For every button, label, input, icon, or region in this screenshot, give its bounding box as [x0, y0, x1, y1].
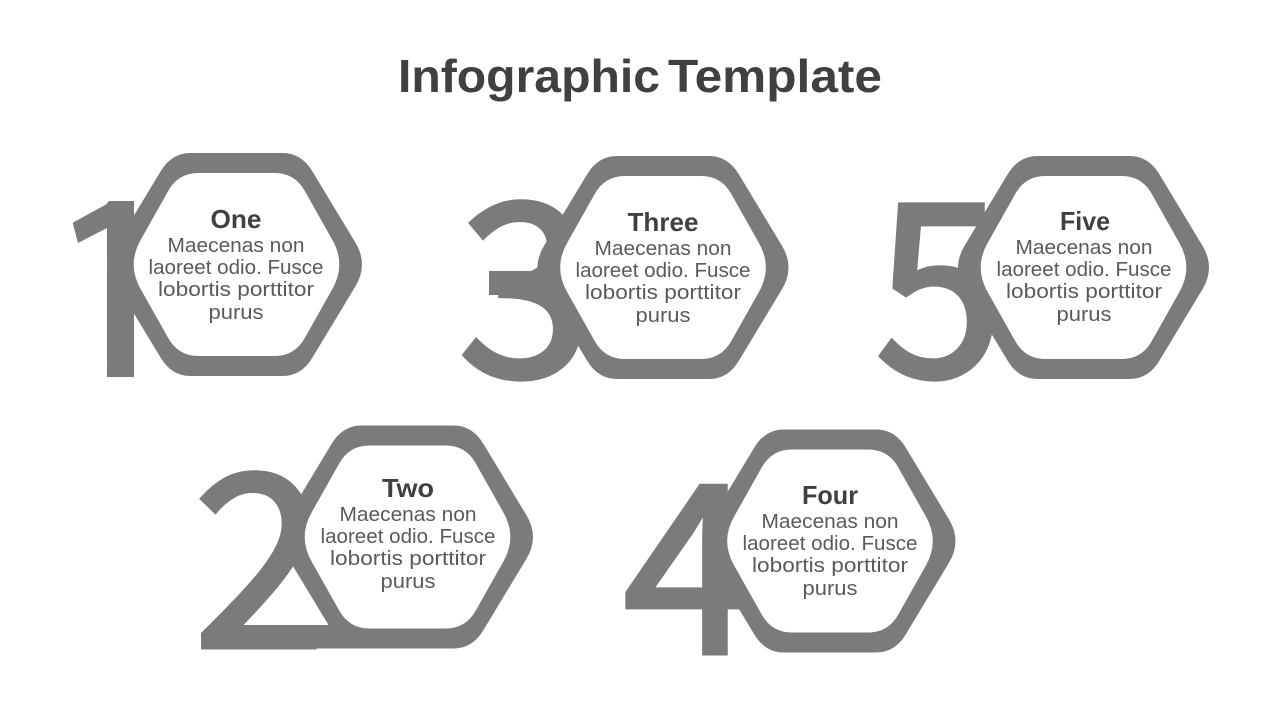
item five	[875, 97, 1209, 445]
text two	[320, 473, 496, 593]
item four	[623, 382, 956, 720]
text two: Two	[382, 473, 434, 503]
text one: purus	[208, 302, 264, 324]
text three	[576, 207, 750, 327]
text three: purus	[636, 305, 690, 327]
text five: Maecenas non	[1016, 237, 1152, 259]
text four	[742, 480, 918, 600]
text one	[148, 204, 324, 324]
number 1: 1	[47, 100, 180, 447]
text four: laoreet odio. Fusce	[742, 533, 918, 555]
item two	[193, 370, 533, 717]
number 1	[72, 201, 134, 377]
number 2: 2	[193, 370, 326, 717]
text four: purus	[802, 578, 858, 600]
item three	[458, 99, 788, 446]
text three: laoreet odio. Fusce	[576, 260, 750, 282]
hexagon five	[958, 156, 1209, 379]
text three: Maecenas non	[594, 238, 732, 260]
hexagon four	[704, 430, 956, 652]
text five: Five	[1060, 206, 1110, 236]
text two: laoreet odio. Fusce	[320, 526, 496, 548]
hexagon two	[282, 426, 533, 648]
number 4: 4	[623, 382, 756, 720]
number 3: 3	[458, 99, 591, 446]
title: Template	[668, 50, 882, 102]
text five: lobortis porttitor	[1006, 281, 1162, 303]
text five: laoreet odio. Fusce	[996, 259, 1172, 281]
text four: Maecenas non	[762, 511, 898, 533]
text four: lobortis porttitor	[752, 555, 908, 577]
text one: Maecenas non	[168, 235, 304, 257]
text two: Maecenas non	[340, 504, 476, 526]
text five	[996, 206, 1172, 326]
text three: Three	[628, 207, 698, 237]
hexagon one	[111, 153, 362, 376]
text five: purus	[1056, 304, 1112, 326]
text one: One	[210, 204, 262, 234]
number 5: 5	[875, 97, 1003, 445]
item one	[72, 153, 362, 377]
text three: lobortis porttitor	[585, 282, 741, 304]
text two: purus	[380, 571, 436, 593]
text one: lobortis porttitor	[158, 279, 314, 301]
hexagon three	[538, 156, 788, 379]
text two: lobortis porttitor	[330, 548, 486, 570]
title: Infographic	[398, 50, 660, 102]
text one: laoreet odio. Fusce	[148, 257, 324, 279]
title	[398, 50, 882, 102]
text four: Four	[802, 480, 858, 510]
